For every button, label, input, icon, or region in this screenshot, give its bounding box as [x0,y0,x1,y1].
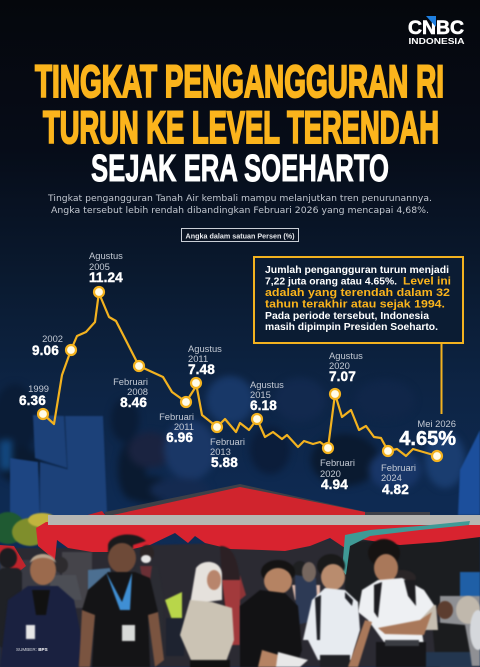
callout: tahun terakhir atau sejak 1994. [265,298,445,310]
intro text [47,194,432,216]
blue panels in crowd [10,415,480,526]
data labels: 5.88 [211,455,238,470]
left man in plaid [0,554,82,667]
data labels: Februari [381,462,416,473]
tent left drape [0,545,26,571]
man in black t-shirt with cap [79,534,164,667]
logo: CNBC Indonesia: CNBC [408,17,464,39]
unit label: Angka dalam satuan Persen (%) [186,234,294,240]
data labels: 2020 [320,468,341,479]
data labels: Agustus [188,343,222,354]
data labels: Mei 2026 [417,418,456,429]
tent white roof band [48,515,480,525]
data labels: 6.96 [166,430,193,445]
callout: Level ini [403,276,451,288]
tent roof frame [105,484,430,518]
data labels: 4.82 [382,482,409,497]
callout: Pada periode tersebut, Indonesia [265,311,429,322]
data labels: 2002 [42,333,63,344]
data labels: 2013 [210,446,231,457]
data labels [19,250,456,497]
data labels: 7.07 [329,369,356,384]
tent roof red canopy [113,487,365,516]
student with backpack [348,539,434,667]
callout: adalah yang terendah dalam 32 [265,287,450,299]
data points [38,287,442,461]
data labels: 2015 [250,389,271,400]
tent teal pipe [342,521,470,575]
intro text: Angka tersebut lebih rendah dibandingkan Februari 2026 yang mencapai 4,68%. [51,206,429,216]
data labels: Agustus [89,250,123,261]
data labels: 6.18 [250,398,277,413]
data labels: 7.48 [188,362,215,377]
line chart [19,250,456,497]
woman in hijab [180,562,234,667]
callout: Jumlah pengangguran turun menjadi [265,265,449,276]
data labels: Agustus [250,379,284,390]
data labels: 6.36 [19,393,46,408]
intro text: Tingkat pengangguran Tanah Air kembali mampu melanjutkan tren penurunannya. [47,194,432,204]
data labels: 2011 [188,353,208,364]
data labels: 2020 [329,360,350,371]
background people [0,545,480,667]
data labels: 8.46 [120,395,147,410]
callout: masih dipimpin Presiden Soeharto. [265,322,438,333]
data labels: Februari [159,411,194,422]
data labels: 2005 [89,261,110,272]
background crowd photo [0,376,465,504]
callout: 7,22 juta orang atau 4.65%. [265,276,397,288]
logo: CNBC Indonesia: INDONESIA [408,36,464,46]
student in white shirt [303,554,360,667]
tent interior [0,535,480,667]
unit label [182,228,298,242]
data labels: 2011 [174,421,194,432]
trees [0,512,56,546]
data labels: 4.65% [399,428,456,450]
tent red valance [36,522,480,560]
data labels: 11.24 [89,270,123,285]
callout [254,257,463,414]
data labels: Agustus [329,350,363,361]
data labels: 4.94 [321,477,348,492]
data labels: Februari [113,376,148,387]
source: SUMBER: BPS [16,647,48,652]
data labels: Februari [210,436,245,447]
data labels: 1999 [28,383,49,394]
data labels: 9.06 [32,343,59,358]
data labels: Februari [320,457,355,468]
data labels: 2008 [127,386,148,397]
title [35,56,444,190]
man in black shirt [240,560,308,667]
data labels: 2024 [381,472,402,483]
background photo of tent and crowd [0,484,480,667]
tent roof left canopy [88,511,106,515]
